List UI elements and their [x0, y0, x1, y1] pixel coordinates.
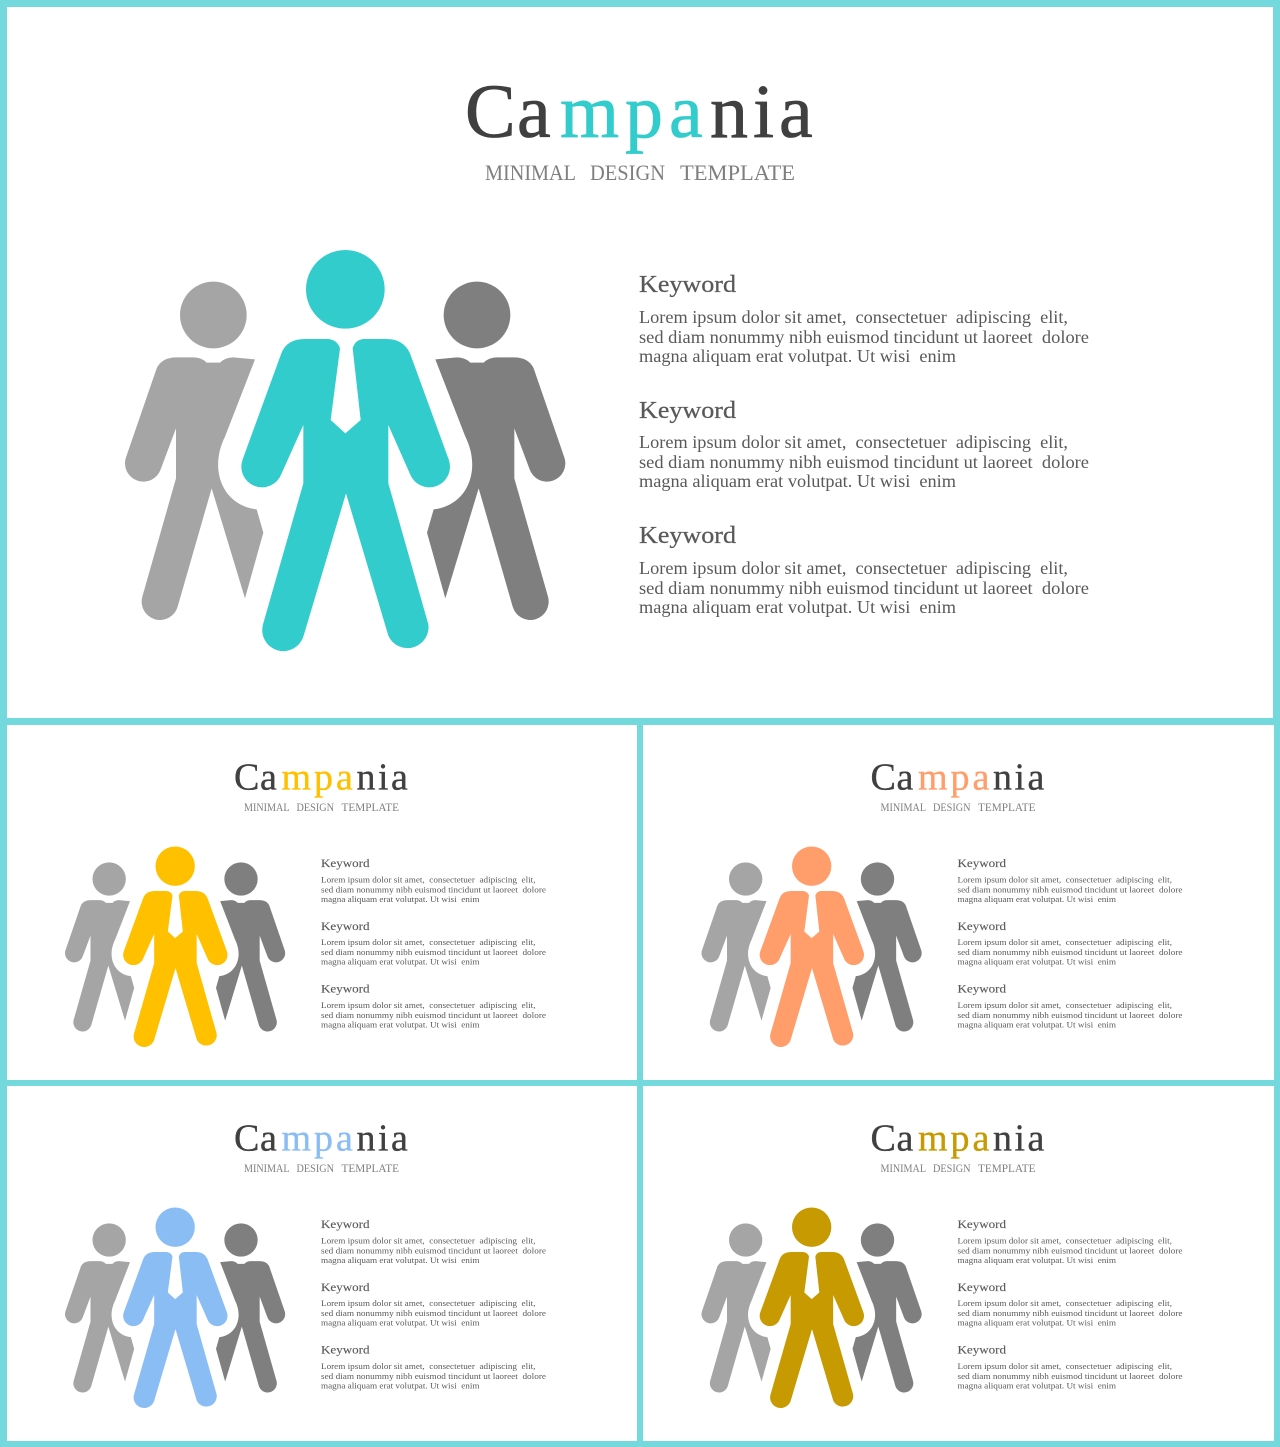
left grey person [125, 282, 263, 620]
text block 1 [958, 1217, 1183, 1265]
subtitle: DESIGN [296, 1163, 334, 1175]
right dark grey person [852, 862, 922, 1032]
text block 1: Keyword [321, 856, 370, 870]
subtitle: DESIGN [590, 160, 665, 185]
text block 3: sed diam nonummy nibh euismod tincidunt ut laoreet dolore [321, 1371, 546, 1381]
text block 2: Lorem ipsum dolor sit amet, consectetuer adipiscing elit, [639, 432, 1068, 452]
text block 1 [321, 1217, 546, 1265]
text block 1: sed diam nonummy nibh euismod tincidunt ut laoreet dolore [639, 327, 1089, 347]
title: Campania [234, 1118, 408, 1160]
text block 3: sed diam nonummy nibh euismod tincidunt ut laoreet dolore [958, 1371, 1183, 1381]
text block 1 [958, 856, 1183, 904]
text block 2: sed diam nonummy nibh euismod tincidunt ut laoreet dolore [958, 1308, 1183, 1318]
left grey person [65, 1223, 134, 1393]
icon: three business people [701, 1208, 922, 1408]
text block 3: Lorem ipsum dolor sit amet, consectetuer adipiscing elit, [639, 558, 1068, 578]
text block 3: Keyword [321, 982, 370, 996]
subtitle [244, 1163, 399, 1175]
text block 2: Keyword [639, 398, 736, 424]
text block 1: magna aliquam erat volutpat. Ut wisi enim [321, 894, 480, 904]
text block 2 [958, 1280, 1183, 1328]
center highlighted person [760, 846, 864, 1047]
center highlighted person [760, 1208, 864, 1408]
text block 2 [639, 398, 1089, 491]
center highlighted person [123, 846, 228, 1047]
text block 2: Lorem ipsum dolor sit amet, consectetuer adipiscing elit, [321, 1298, 536, 1308]
text block 3 [958, 982, 1183, 1030]
text block 3: Lorem ipsum dolor sit amet, consectetuer adipiscing elit, [321, 1000, 536, 1010]
text block 1: Lorem ipsum dolor sit amet, consectetuer adipiscing elit, [639, 307, 1068, 327]
icon: three business people [701, 846, 922, 1047]
subtitle [244, 802, 399, 814]
text block 3 [321, 982, 546, 1030]
text block 3: sed diam nonummy nibh euismod tincidunt ut laoreet dolore [958, 1010, 1183, 1020]
subtitle: TEMPLATE [342, 802, 399, 814]
text block 3: Keyword [958, 1342, 1006, 1356]
text block 1: magna aliquam erat volutpat. Ut wisi enim [321, 1255, 480, 1265]
text block 2: sed diam nonummy nibh euismod tincidunt ut laoreet dolore [958, 947, 1183, 957]
title: Campania [870, 1118, 1044, 1160]
text block 2: Keyword [958, 1280, 1006, 1294]
text block 1: magna aliquam erat volutpat. Ut wisi enim [958, 894, 1116, 904]
text block 1: Keyword [958, 1217, 1006, 1231]
text block 1 [321, 856, 546, 904]
subtitle: TEMPLATE [342, 1163, 399, 1175]
text block 3: magna aliquam erat volutpat. Ut wisi enim [958, 1020, 1116, 1030]
text block 2: sed diam nonummy nibh euismod tincidunt ut laoreet dolore [639, 452, 1089, 472]
text block 1 [639, 272, 1089, 366]
text block 3: Keyword [958, 982, 1006, 996]
subtitle: MINIMAL [880, 802, 926, 814]
text block 3: Lorem ipsum dolor sit amet, consectetuer adipiscing elit, [321, 1361, 536, 1371]
panel: blue slide [7, 1086, 637, 1441]
text block 2: Keyword [321, 1280, 370, 1294]
text block 3: Lorem ipsum dolor sit amet, consectetuer adipiscing elit, [958, 1000, 1172, 1010]
subtitle [485, 160, 795, 185]
subtitle: MINIMAL [880, 1163, 926, 1175]
text block 1: Keyword [321, 1217, 370, 1231]
text block 1: Keyword [639, 272, 736, 298]
left grey person [701, 1223, 771, 1393]
text block 1: Lorem ipsum dolor sit amet, consectetuer adipiscing elit, [321, 1236, 536, 1246]
icon: three business people [65, 1208, 285, 1408]
subtitle: TEMPLATE [978, 802, 1036, 814]
text block 2: magna aliquam erat volutpat. Ut wisi enim [958, 1318, 1116, 1328]
right dark grey person [852, 1223, 922, 1393]
text block 2: Lorem ipsum dolor sit amet, consectetuer adipiscing elit, [958, 1298, 1172, 1308]
subtitle [880, 802, 1036, 814]
text block 2: Keyword [958, 919, 1006, 933]
text block 3: Lorem ipsum dolor sit amet, consectetuer adipiscing elit, [958, 1361, 1172, 1371]
subtitle: TEMPLATE [978, 1163, 1036, 1175]
text block 1: sed diam nonummy nibh euismod tincidunt ut laoreet dolore [958, 1246, 1183, 1256]
title: Campania [465, 70, 813, 154]
title: Campania [234, 756, 408, 798]
text block 2: Lorem ipsum dolor sit amet, consectetuer adipiscing elit, [321, 937, 536, 947]
text block 2: Lorem ipsum dolor sit amet, consectetuer adipiscing elit, [958, 937, 1172, 947]
text block 2: magna aliquam erat volutpat. Ut wisi enim [321, 1318, 480, 1328]
left grey person [701, 862, 771, 1032]
text block 1: magna aliquam erat volutpat. Ut wisi enim [958, 1255, 1116, 1265]
text block 3: magna aliquam erat volutpat. Ut wisi enim [639, 597, 956, 617]
text block 1: Keyword [958, 856, 1006, 870]
subtitle: MINIMAL [485, 160, 576, 185]
left grey person [65, 862, 134, 1032]
text block 2 [321, 919, 546, 966]
panel: main teal slide [7, 7, 1273, 718]
text block 1: sed diam nonummy nibh euismod tincidunt ut laoreet dolore [321, 884, 546, 894]
text block 2 [321, 1280, 546, 1328]
text block 1: Lorem ipsum dolor sit amet, consectetuer adipiscing elit, [958, 874, 1172, 884]
panel: gold slide [643, 1086, 1274, 1441]
subtitle [880, 1163, 1036, 1175]
text block 3 [958, 1342, 1183, 1390]
center highlighted person [241, 250, 450, 651]
text block 3: Keyword [321, 1342, 370, 1356]
subtitle: DESIGN [933, 1163, 970, 1175]
text block 2: Keyword [321, 919, 370, 933]
text block 1: Lorem ipsum dolor sit amet, consectetuer adipiscing elit, [321, 874, 536, 884]
text block 1: Lorem ipsum dolor sit amet, consectetuer adipiscing elit, [958, 1236, 1172, 1246]
text block 3: sed diam nonummy nibh euismod tincidunt ut laoreet dolore [639, 578, 1089, 598]
text block 3: sed diam nonummy nibh euismod tincidunt ut laoreet dolore [321, 1010, 546, 1020]
text block 2 [958, 919, 1183, 966]
text block 3: magna aliquam erat volutpat. Ut wisi enim [321, 1020, 480, 1030]
right dark grey person [216, 1223, 285, 1393]
text block 2: magna aliquam erat volutpat. Ut wisi enim [958, 956, 1116, 966]
text block 1: sed diam nonummy nibh euismod tincidunt ut laoreet dolore [958, 884, 1183, 894]
text block 2: magna aliquam erat volutpat. Ut wisi enim [639, 471, 956, 491]
icon: three business people [65, 846, 285, 1047]
text block 2: magna aliquam erat volutpat. Ut wisi enim [321, 956, 480, 966]
right dark grey person [427, 282, 565, 620]
text block 3: Keyword [639, 523, 736, 549]
subtitle: DESIGN [296, 802, 334, 814]
text block 2: sed diam nonummy nibh euismod tincidunt ut laoreet dolore [321, 947, 546, 957]
text block 3 [321, 1342, 546, 1390]
text block 3: magna aliquam erat volutpat. Ut wisi enim [321, 1380, 480, 1390]
text block 3: magna aliquam erat volutpat. Ut wisi enim [958, 1380, 1116, 1390]
text block 2: sed diam nonummy nibh euismod tincidunt ut laoreet dolore [321, 1308, 546, 1318]
text block 3 [639, 523, 1089, 617]
right dark grey person [216, 862, 285, 1032]
center highlighted person [123, 1208, 228, 1408]
panel: orange slide [643, 725, 1274, 1080]
title: Campania [870, 756, 1044, 798]
text block 1: magna aliquam erat volutpat. Ut wisi enim [639, 346, 956, 366]
subtitle: DESIGN [933, 802, 970, 814]
subtitle: TEMPLATE [680, 160, 795, 185]
subtitle: MINIMAL [244, 802, 290, 814]
icon: three business people [125, 250, 565, 651]
text block 1: sed diam nonummy nibh euismod tincidunt ut laoreet dolore [321, 1246, 546, 1256]
subtitle: MINIMAL [244, 1163, 290, 1175]
panel: yellow slide [7, 725, 637, 1080]
